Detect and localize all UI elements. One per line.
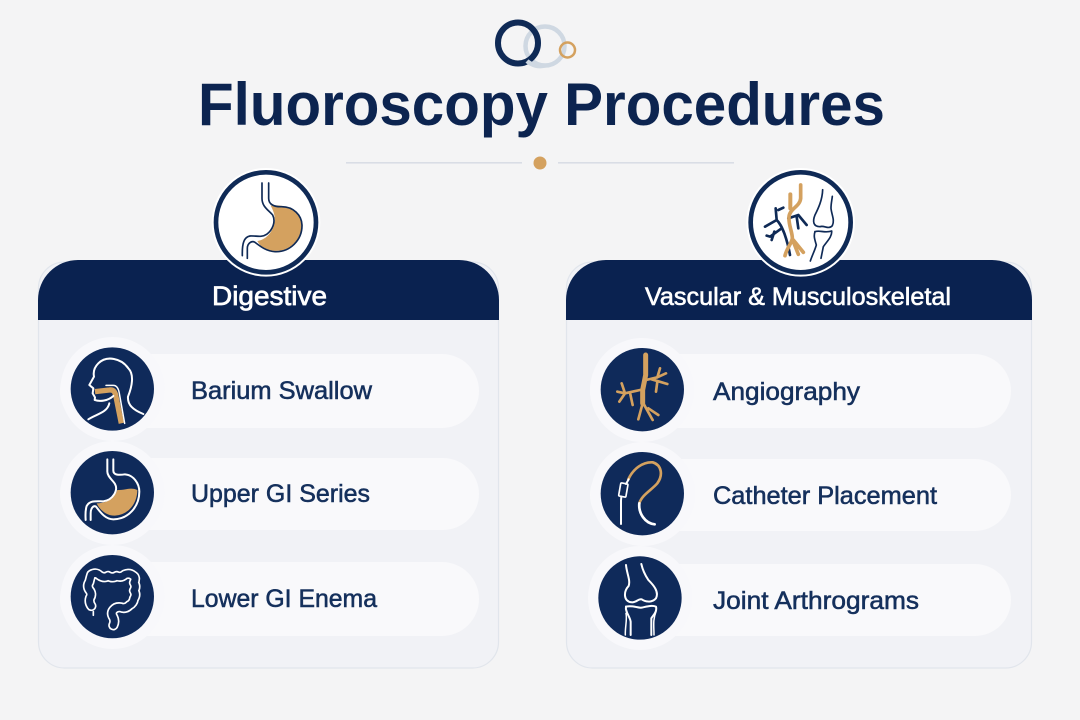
icon halo [591, 442, 695, 546]
icon: vessel tree [601, 348, 684, 431]
icon: knee joint [598, 556, 682, 640]
icon: vessels and knee badge [746, 168, 855, 277]
row: catheter placement [590, 442, 1011, 546]
row: angiography [590, 338, 1011, 442]
title divider [346, 156, 734, 170]
row label: Joint Arthrograms [713, 587, 919, 615]
panel: digestive [38, 168, 499, 668]
icon: stomach badge [212, 168, 320, 277]
row label: Barium Swallow [191, 377, 373, 405]
row label: Angiography [713, 378, 861, 406]
icon: catheter [601, 452, 684, 535]
row: lower gi enema [60, 545, 479, 649]
row label: Lower GI Enema [191, 585, 377, 613]
row: barium swallow [60, 337, 479, 441]
icon: stomach [71, 451, 154, 534]
logo: overlapping rings [498, 22, 575, 66]
panel header [566, 260, 1032, 320]
icon halo [588, 546, 692, 650]
row label: Catheter Placement [713, 482, 937, 510]
panel: vascular and musculoskeletal [566, 168, 1032, 668]
pill [60, 354, 479, 428]
icon halo [60, 545, 164, 649]
title: Fluoroscopy Procedures [198, 71, 885, 138]
panel body [38, 262, 498, 668]
pill [590, 459, 1011, 531]
panel body [566, 262, 1032, 668]
pill [590, 564, 1011, 636]
icon: head and throat [71, 347, 154, 431]
pill [60, 562, 479, 636]
row: upper gi series [60, 441, 479, 545]
header label: Vascular & Musculoskeletal [645, 283, 951, 311]
row label: Upper GI Series [191, 480, 370, 508]
header label: Digestive [212, 281, 327, 311]
icon halo [60, 337, 164, 441]
icon: colon [71, 555, 154, 638]
pill [60, 458, 479, 530]
icon halo [590, 338, 694, 442]
row: joint arthrograms [588, 546, 1011, 650]
icon halo [60, 441, 164, 545]
panel header [38, 260, 499, 320]
pill [590, 354, 1011, 428]
